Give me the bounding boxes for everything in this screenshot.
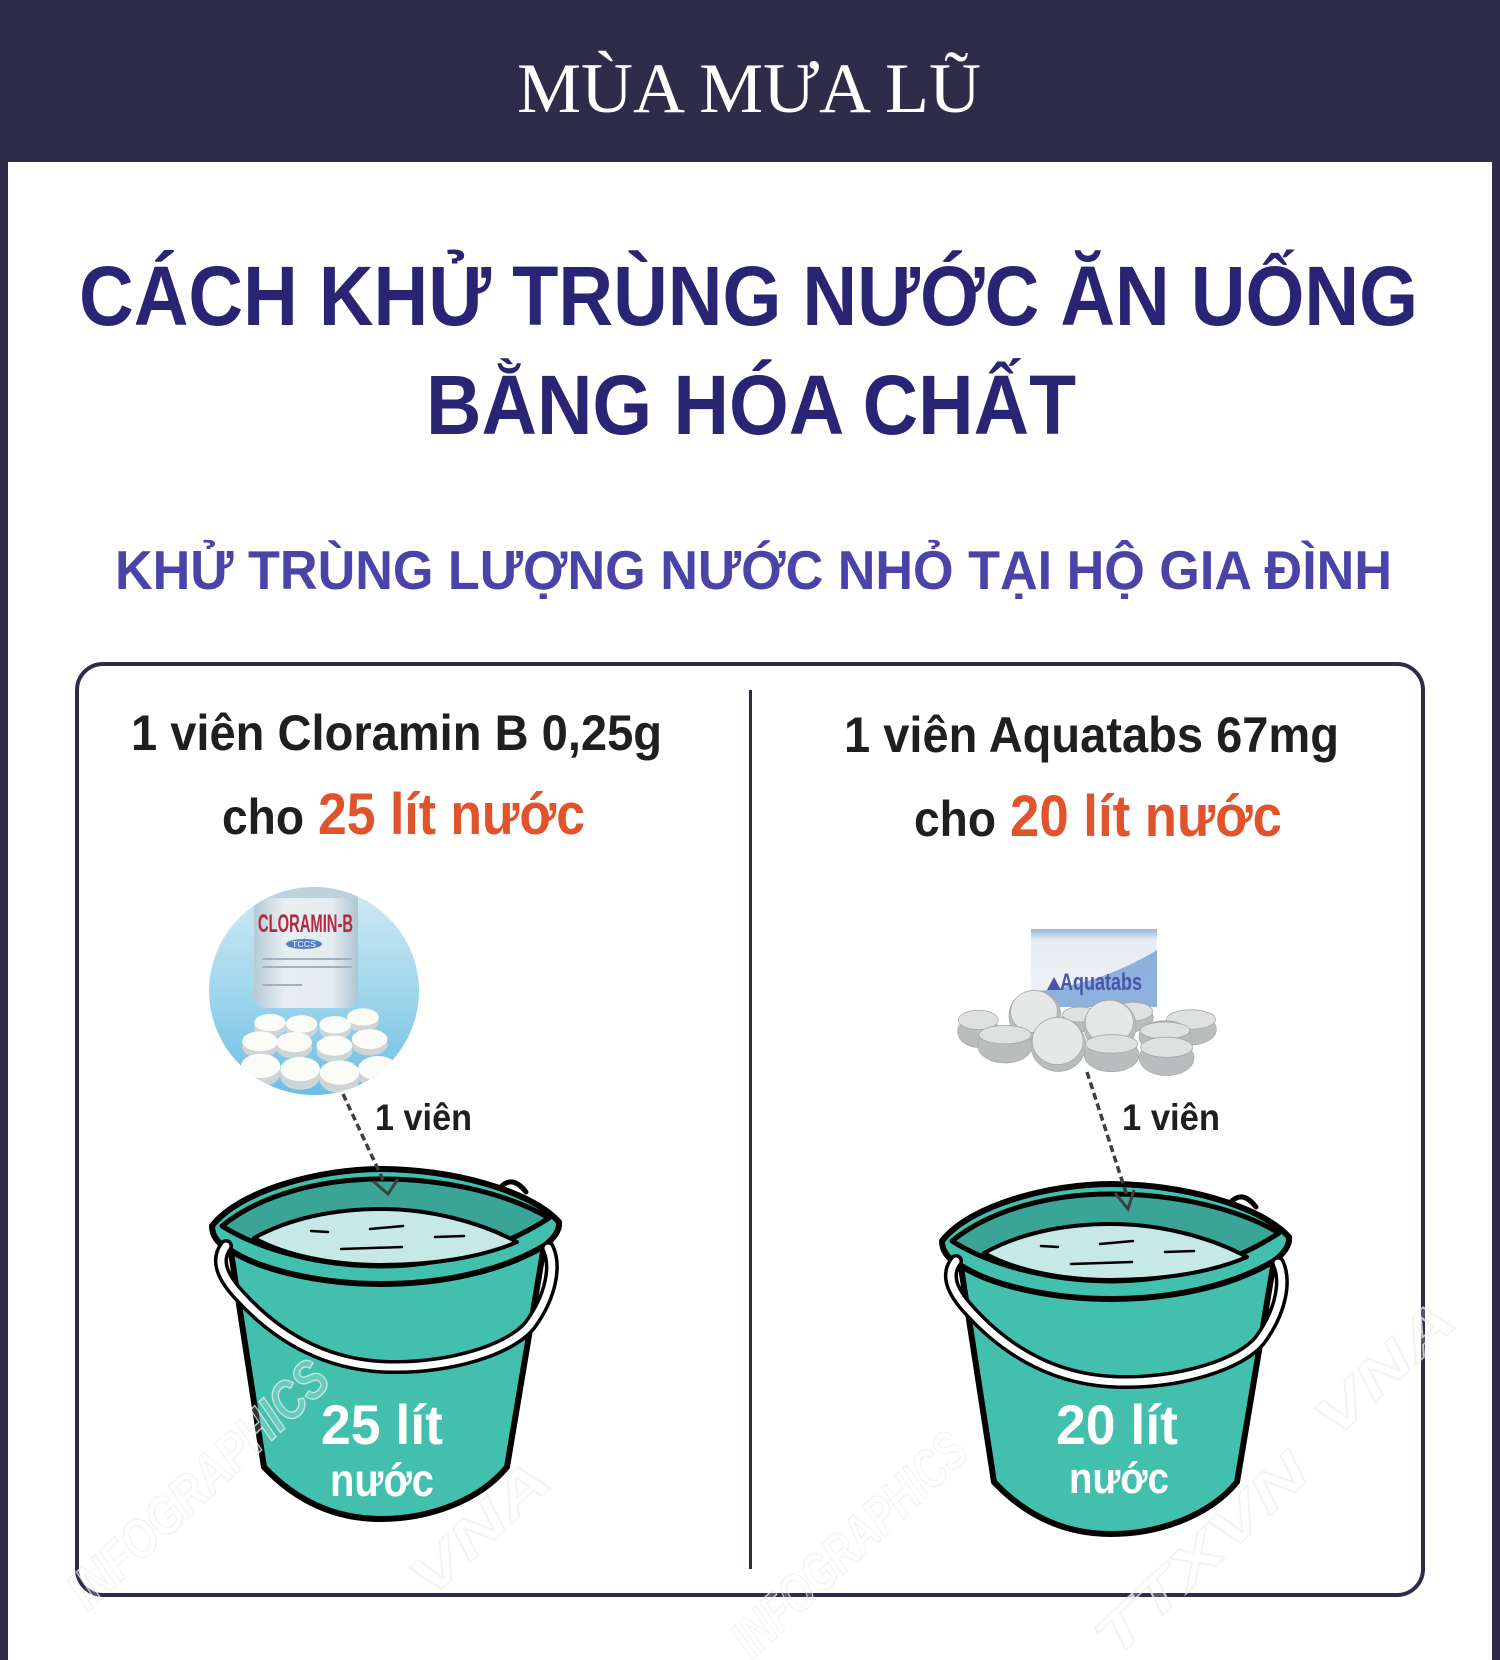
header band <box>0 0 1500 162</box>
bucket label: nước: nước <box>330 1454 434 1506</box>
watermark: INFOGRAPHICS <box>719 1420 980 1660</box>
bucket label: 20 lít: 20 lít <box>1056 1393 1178 1456</box>
arrow: tablet into left bucket <box>343 1094 398 1194</box>
arrow: tablet into right bucket <box>1087 1072 1134 1209</box>
bucket label: nước: nước <box>1069 1454 1169 1503</box>
left side border <box>0 160 8 1660</box>
icon: Cloramin-B bottle and tablets photo: CLORAMIN-B <box>258 910 353 938</box>
watermark: INFOGRAPHICS <box>55 1348 341 1621</box>
icon: Aquatabs packet and tablets photo <box>958 929 1216 1076</box>
bucket label: 25 lít: 25 lít <box>321 1393 443 1456</box>
label: 1 viên left: 1 viên <box>375 1097 472 1138</box>
icon: Aquatabs packet and tablets photo: Aquatabs <box>1060 969 1142 996</box>
subtitle: KHỬ TRÙNG LƯỢNG NƯỚC NHỎ TẠI HỘ GIA ĐÌNH <box>115 539 1392 601</box>
icon: Cloramin-B bottle and tablets photo <box>209 887 419 1095</box>
right side border <box>1492 160 1500 1660</box>
watermark: VNA <box>397 1449 563 1609</box>
icon: left bucket <box>212 1169 559 1519</box>
left dose amount: 25 lít nước <box>318 782 585 847</box>
header title: MÙA MƯA LŨ <box>517 50 981 128</box>
left dose heading: 1 viên Cloramin B 0,25g <box>131 705 662 761</box>
icon: Cloramin-B bottle and tablets photo: TCCS <box>292 940 316 949</box>
watermark <box>55 1289 1468 1660</box>
right dose heading: 1 viên Aquatabs 67mg <box>844 707 1339 763</box>
right dose amount: 20 lít nước <box>1010 784 1282 849</box>
panel divider <box>749 690 752 1569</box>
watermark: VNA <box>1302 1289 1468 1449</box>
icon: right bucket <box>942 1184 1289 1534</box>
left dose "cho": cho <box>222 789 304 845</box>
main title line 2: BẰNG HÓA CHẤT <box>426 358 1076 452</box>
right dose "cho": cho <box>914 791 996 847</box>
label: 1 viên right: 1 viên <box>1122 1097 1220 1138</box>
panel: dosage comparison frame <box>77 664 1423 1595</box>
